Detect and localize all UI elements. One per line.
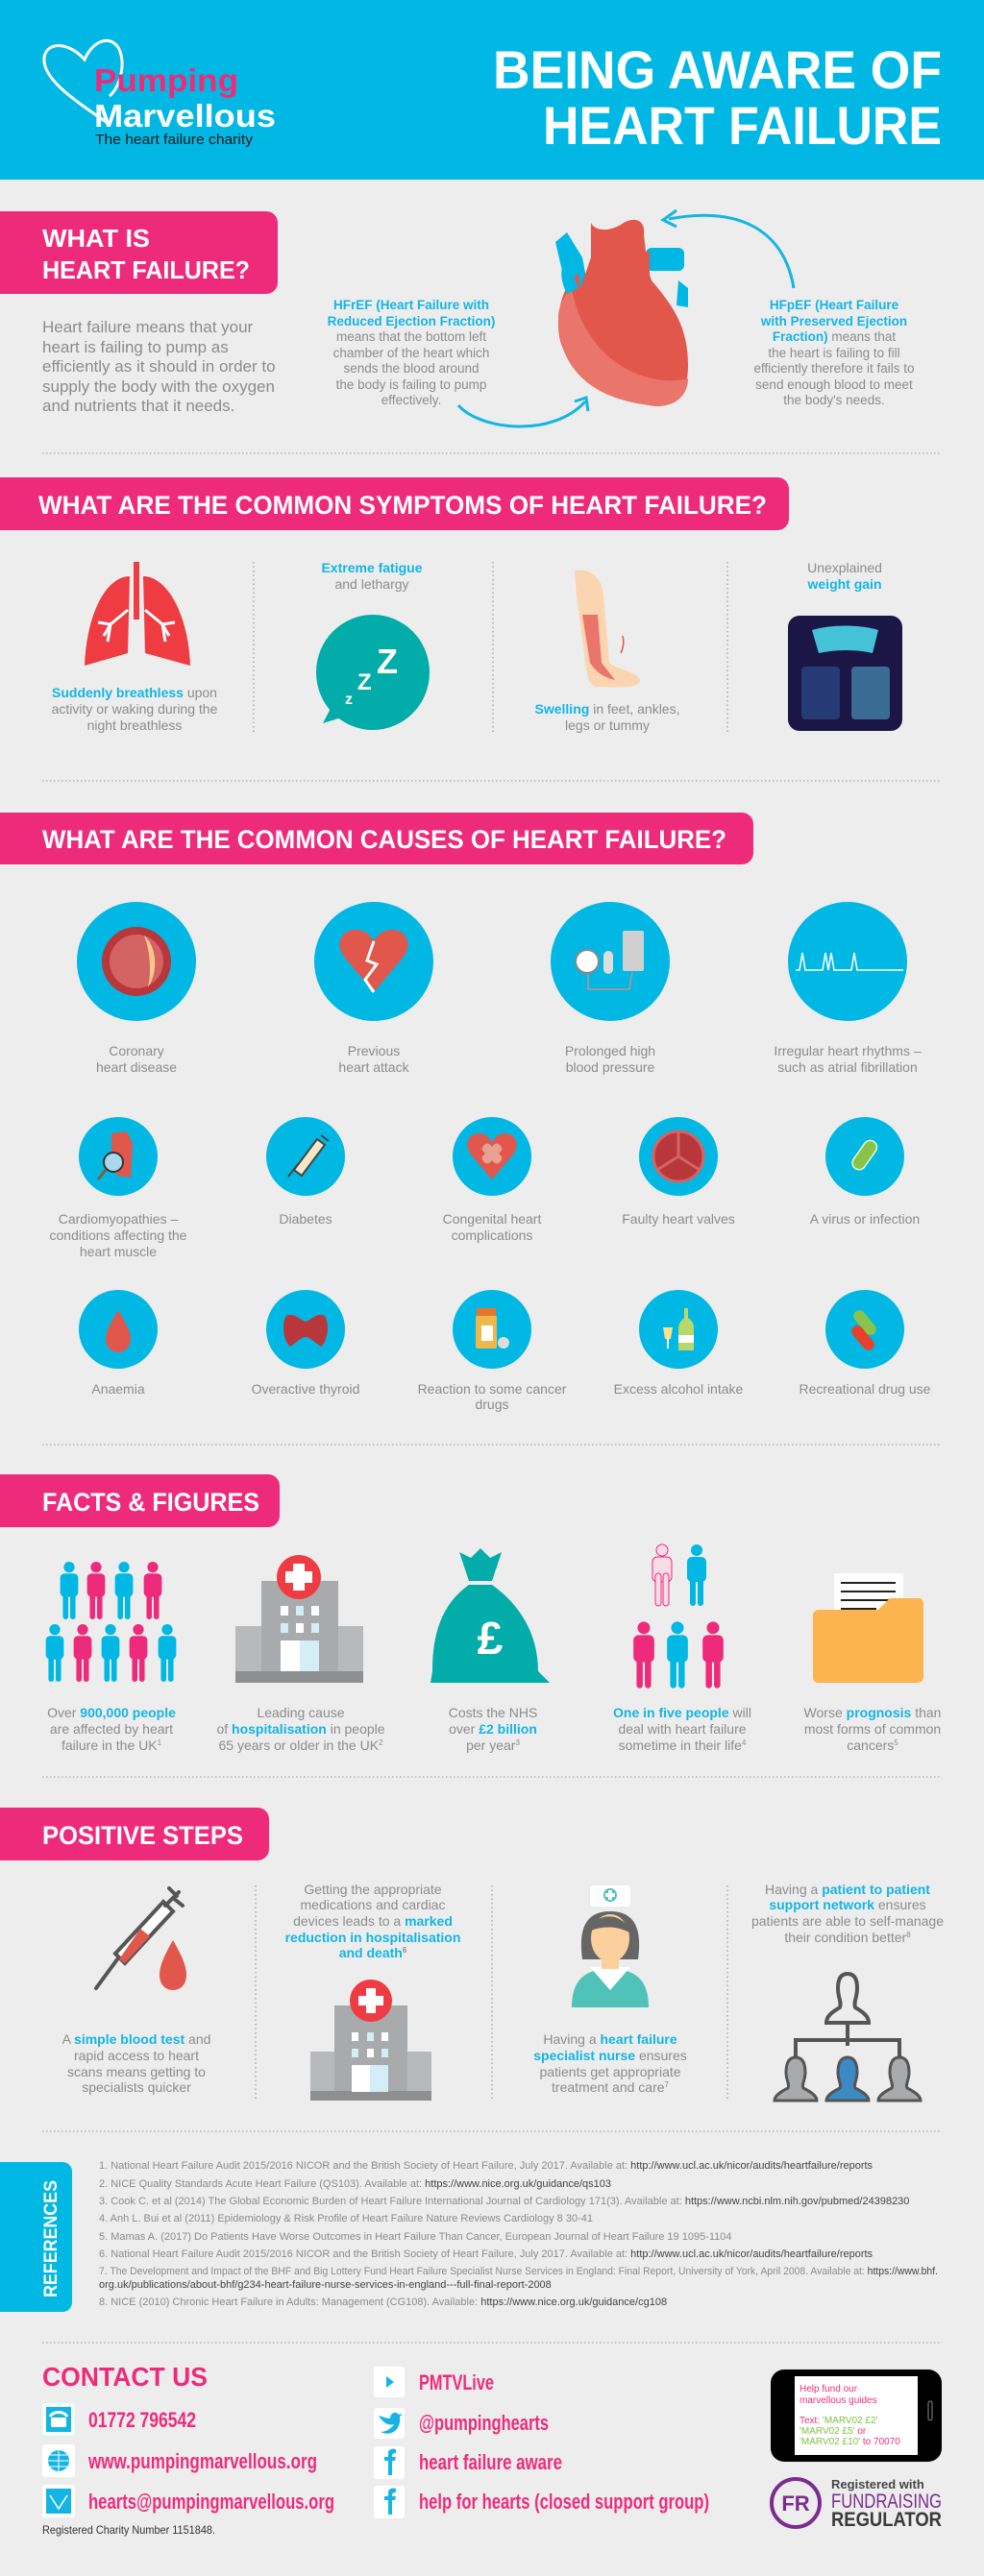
section: symptoms (0, 477, 902, 733)
text: breathless (52, 685, 218, 733)
text: support network: Having a patient to patient (765, 1882, 930, 1897)
cause: cardiomyopathies: conditions affecting the (50, 1227, 187, 1243)
section: what is heart failure (0, 210, 915, 426)
references tab (0, 2162, 72, 2312)
phone donation callout: 'MARV02 £10' to 70070 (800, 2437, 900, 2447)
heading tab: WHAT ARE THE COMMON SYMPTOMS OF HEART FAILURE? (38, 491, 767, 520)
text: blood test (62, 2031, 210, 2095)
arrow: top curved (663, 210, 794, 288)
icon: globe (42, 2444, 75, 2477)
heading tab (0, 813, 753, 864)
icon: email (42, 2485, 75, 2517)
cause: alcohol: Excess alcohol intake (614, 1381, 744, 1397)
section: causes (0, 813, 931, 1412)
cause: faulty valves (622, 1117, 735, 1227)
facts labels: deal with heart failure (618, 1721, 747, 1737)
reference list: 2. NICE Quality Standards Acute Heart Failure (QS103). Available at: https://www.nice.org.uk/guidance/qs103 (99, 2178, 611, 2190)
facts labels: 1 (158, 1738, 162, 1747)
text: charity number: Registered Charity Number 1151848. (42, 2523, 215, 2537)
text: blood test: scans means getting to (67, 2064, 206, 2079)
text: blood test: rapid access to heart (74, 2048, 199, 2063)
icon: youtube (374, 2367, 405, 2397)
cause: cardiomyopathies: Cardiomyopathies – (59, 1211, 178, 1227)
cause: previous heart attack: heart attack (338, 1059, 410, 1075)
icon: one in five people (633, 1544, 724, 1689)
cause: faulty valves: Faulty heart valves (622, 1211, 735, 1227)
facts labels: failure in the UK (62, 1738, 158, 1753)
icon: facebook 2 (374, 2486, 405, 2518)
facts labels: are affected by heart (50, 1721, 173, 1737)
text: HFrEF: the body is failing to pump (336, 377, 486, 392)
reference list: 6. National Heart Failure Audit 2015/2016 NICOR and the British Society of Heart Failure, July 2017. Available at: http://www.ucl.ac.uk/nicor/audits/heartfailure/reports (99, 2248, 873, 2260)
icon: folder (813, 1573, 923, 1683)
text: fatigue: Extreme fatigue (321, 560, 423, 575)
fundraising regulator logo: Registered with (831, 2477, 924, 2491)
heading tab (0, 211, 278, 294)
cause: coronary heart disease (77, 902, 196, 1075)
heading tab: WHAT ARE THE COMMON CAUSES OF HEART FAILURE? (42, 825, 726, 854)
text: support network: patients are able to self-manage (751, 1913, 944, 1929)
fundraising regulator logo: FR (781, 2491, 810, 2515)
text: website: www.pumpingmarvellous.org (87, 2449, 317, 2473)
facts labels: 2 (379, 1738, 383, 1747)
text: definition: supply the body with the oxygen (42, 377, 275, 396)
text: HFrEF: sends the blood around (343, 361, 480, 376)
cause: irregular rhythm: such as atrial fibrillation (777, 1059, 918, 1075)
text: medications: 6 (403, 1946, 407, 1955)
icon: sleep bubble (316, 615, 430, 730)
heading tab (0, 477, 789, 530)
cause: coronary heart disease: Coronary (109, 1043, 164, 1058)
reference list: 1. National Heart Failure Audit 2015/2016 NICOR and the British Society of Heart Failure, July 2017. Available at: http://www.ucl.ac.uk/nicor/audits/heartfailure/reports (99, 2160, 873, 2172)
icon: nurse (572, 1885, 649, 2007)
text: medications: Getting the appropriate (304, 1882, 442, 1897)
text: weight gain: weight gain (807, 576, 882, 592)
references tab: REFERENCES (41, 2180, 62, 2297)
text: specialist nurse: 7 (665, 2080, 670, 2089)
cause: blood pressure: blood pressure (566, 1059, 655, 1075)
facts labels: Leading cause (257, 1705, 345, 1720)
header banner (0, 0, 984, 180)
logo: Pumping (94, 62, 238, 98)
facts labels: most forms of common (804, 1721, 941, 1737)
text: PMTVLive: PMTVLive (419, 2370, 494, 2394)
phone donation callout: Help fund our (800, 2384, 858, 2394)
text: HFpEF: with Preserved Ejection (760, 314, 907, 328)
cause: cardiomyopathies (50, 1117, 187, 1259)
fundraising regulator logo (772, 2477, 942, 2531)
contact heading: CONTACT US (42, 2362, 208, 2392)
text: medications (285, 1882, 460, 1960)
icon: support network (775, 1974, 921, 2101)
cause: congenital: complications (452, 1227, 532, 1243)
phone donation callout (771, 2369, 942, 2462)
contact us (42, 2362, 942, 2537)
text: HFpEF: HFpEF (Heart Failure (770, 298, 899, 312)
cause: recreational drugs (800, 1290, 931, 1397)
cause: anaemia (79, 1290, 158, 1397)
text: HFpEF: send enough blood to meet (755, 377, 913, 392)
text: definition: Heart failure means that your (42, 318, 254, 336)
text: swelling (535, 701, 679, 733)
icon: sleep bubble: Z (377, 642, 398, 681)
text: medications: medications and cardiac (301, 1897, 445, 1912)
cause: irregular rhythm: Irregular heart rhythms – (774, 1043, 922, 1058)
text: support network: their condition better (784, 1930, 906, 1945)
facts labels: 4 (742, 1738, 747, 1747)
phone donation callout: Text: 'MARV02 £2' (800, 2416, 878, 2426)
heading tab: FACTS & FIGURES (42, 1488, 259, 1517)
section: facts & figures (0, 1474, 941, 1753)
icon: phone (42, 2403, 75, 2436)
logo: The heart failure charity (95, 132, 254, 148)
heading tab (0, 1474, 280, 1527)
heading tab: WHAT IS (42, 224, 150, 253)
text: support network: 8 (906, 1931, 911, 1939)
text: weight gain: Unexplained (807, 560, 882, 575)
text: specialist nurse: treatment and care (552, 2079, 665, 2095)
facts labels: 5 (894, 1738, 898, 1747)
cause: blood pressure: Prolonged high (565, 1043, 655, 1058)
text: twitter handle: @pumpinghearts (419, 2411, 549, 2435)
text: phone: 01772 796542 (88, 2408, 196, 2432)
text: medications: reduction in hospitalisation (285, 1930, 460, 1945)
title (493, 39, 942, 156)
facts labels: One in five people will (613, 1705, 751, 1720)
text: HFpEF: the body's needs. (783, 393, 885, 407)
text: definition: efficiently as it should in order to (42, 357, 276, 376)
facts labels: per year (466, 1738, 515, 1753)
facts labels (47, 1705, 941, 1753)
icon: sleep bubble: z (345, 692, 353, 708)
reference list: org.uk/publications/about-bhf/g234-heart-failure-nurse-services-in-england---full-final-report-2008 (99, 2279, 552, 2291)
phone donation callout: marvellous guides (800, 2395, 877, 2406)
reference list: 3. Cook C. et al (2014) The Global Economic Burden of Heart Failure International Journal of Cardiology 171(3). Available at: https://www.ncbi.nlm.nih.gov/pubmed/24398230 (99, 2196, 909, 2207)
text: blood test: A simple blood test and (62, 2031, 210, 2047)
text: HFrEF (328, 298, 495, 407)
cause: recreational drugs: Recreational drug use (800, 1381, 931, 1397)
text: definition (42, 318, 276, 415)
text: help for hearts: help for hearts (closed support group) (419, 2490, 709, 2514)
cause: previous heart attack (314, 902, 433, 1075)
cause: virus (810, 1117, 920, 1227)
cause: congenital (443, 1117, 541, 1243)
text: support network (751, 1882, 944, 1945)
heading tab (0, 1808, 269, 1860)
phone donation callout: 'MARV02 £5' or (800, 2426, 867, 2437)
text: fatigue (321, 560, 423, 592)
fundraising regulator logo: FUNDRAISING (831, 2491, 942, 2513)
icon: crowd of people (46, 1562, 176, 1682)
heading tab: POSITIVE STEPS (42, 1821, 243, 1850)
text: HFrEF: chamber of the heart which (333, 346, 489, 360)
fundraising regulator logo: REGULATOR (831, 2509, 942, 2531)
references (0, 2160, 938, 2312)
text: specialist nurse: Having a heart failure (543, 2031, 677, 2047)
reference list: 5. Mamas A. (2017) Do Patients Have Worse Outcomes in Heart Failure Than Cancer, European Journal of Heart Failure 19 1095-1104 (99, 2231, 732, 2243)
text: swelling: Swelling in feet, ankles, (535, 701, 679, 717)
cause: cardiomyopathies: heart muscle (80, 1244, 157, 1259)
cause: anaemia: Anaemia (91, 1381, 145, 1397)
text: HFrEF: means that the bottom left (336, 329, 486, 344)
reference list: 7. The Development and Impact of the BHF and Big Lottery Fund Heart Failure Specialist Nurse Services in England: Final Report, University of York, April 2008. Available at: https://www.bhf. (99, 2266, 938, 2277)
text: specialist nurse: specialist nurse ensures (533, 2048, 687, 2063)
text: blood test: specialists quicker (82, 2079, 191, 2095)
cause: diabetes: Diabetes (279, 1211, 332, 1227)
icon: sleep bubble: Z (357, 669, 372, 695)
text: HFrEF: Reduced Ejection Fraction) (328, 314, 495, 328)
icon: money bag (430, 1548, 550, 1683)
text: fatigue: and lethargy (334, 576, 409, 592)
cause: cancer drugs: Reaction to some cancer (418, 1381, 567, 1397)
text: breathless: activity or waking during the (52, 701, 218, 717)
cause: thyroid: Overactive thyroid (252, 1381, 359, 1397)
text: HFrEF: effectively. (381, 393, 441, 407)
text: HFpEF: the heart is failing to fill (768, 346, 900, 360)
text: HFpEF: efficiently therefore it fails to (753, 361, 915, 376)
heading tab: HEART FAILURE? (42, 255, 250, 284)
text: weight gain (807, 560, 882, 592)
logo: Marvellous (94, 98, 276, 134)
facts labels: over £2 billion (449, 1721, 537, 1737)
text: HFrEF: HFrEF (Heart Failure with (333, 298, 489, 312)
facts labels: 3 (515, 1738, 520, 1747)
facts labels: Over 900,000 people (47, 1705, 176, 1720)
text: HFpEF: Fraction) means that (773, 329, 896, 344)
facts labels: Worse prognosis than (804, 1705, 941, 1720)
text: specialist nurse: patients get appropriate (539, 2064, 681, 2079)
arrow: bottom curved (458, 398, 588, 426)
text: heart failure aware: heart failure aware (419, 2450, 562, 2474)
icon: lungs (85, 562, 190, 666)
text: email: hearts@pumpingmarvellous.org (88, 2490, 334, 2514)
text: definition: and nutrients that it needs. (42, 397, 234, 415)
text: medications: and death (339, 1945, 403, 1960)
text: definition: heart is failing to pump as (42, 338, 229, 356)
heart illustration (555, 220, 688, 406)
cause: coronary heart disease: heart disease (96, 1059, 177, 1075)
icon: hospital (310, 1980, 431, 2101)
facts labels: 65 years or older in the UK (219, 1738, 379, 1753)
cause: blood pressure (551, 902, 670, 1075)
title: HEART FAILURE (543, 95, 942, 156)
section: positive steps (0, 1808, 944, 2102)
cause: diabetes (266, 1117, 345, 1227)
icon: scales (788, 616, 902, 731)
icon: hospital (235, 1555, 363, 1683)
text: breathless: Suddenly breathless upon (52, 685, 217, 700)
cause: irregular rhythm (774, 902, 922, 1075)
cause: cancer drugs (418, 1290, 567, 1412)
title: BEING AWARE OF (493, 39, 942, 100)
reference list (99, 2160, 938, 2308)
icon: twitter (374, 2408, 405, 2439)
cause: congenital: Congenital heart (443, 1211, 541, 1227)
icon: syringe and blood drop (96, 1888, 186, 1990)
cause: virus: A virus or infection (810, 1211, 920, 1227)
text: specialist nurse (533, 2031, 687, 2095)
text: HFpEF (753, 298, 915, 407)
cause: alcohol (614, 1290, 744, 1397)
facts labels: Costs the NHS (449, 1705, 537, 1720)
cause: cancer drugs: drugs (475, 1397, 509, 1412)
text: medications: devices leads to a marked (293, 1913, 453, 1929)
facts labels: sometime in their life (619, 1738, 742, 1753)
facts labels: cancers (847, 1738, 894, 1753)
icon: money bag: £ (478, 1614, 504, 1665)
reference list: 4. Anh L. Bui et al (2011) Epidemiology & Risk Profile of Heart Failure Nature Reviews Cardiology 8 30-41 (99, 2213, 593, 2224)
icon: facebook 1 (374, 2446, 405, 2479)
facts labels: of hospitalisation in people (216, 1721, 385, 1737)
cause: thyroid (252, 1290, 359, 1397)
text: support network: support network ensures (769, 1897, 926, 1912)
text: swelling: legs or tummy (565, 717, 650, 733)
logo (44, 40, 276, 148)
icon: swollen leg (575, 571, 640, 687)
reference list: 8. NICE (2010) Chronic Heart Failure in Adults: Management (CG108). Available: https://www.nice.org.uk/guidance/cg108 (99, 2297, 667, 2308)
cause: previous heart attack: Previous (348, 1043, 400, 1058)
text: breathless: night breathless (87, 717, 182, 733)
